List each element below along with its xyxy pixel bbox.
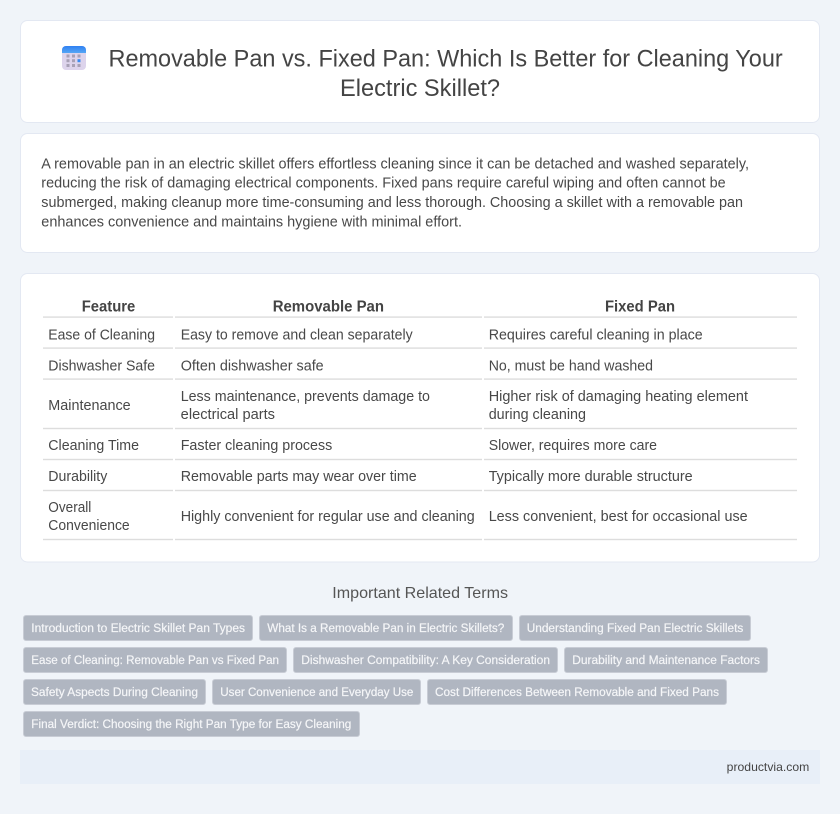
title: Removable Pan vs. Fixed Pan: Which Is Better for Cleaning Your [108,46,783,72]
row: overall convenience [48,500,748,534]
row: maintenance [48,389,748,423]
row: cleaning time: Slower, requires more care [489,438,657,454]
row: overall convenience: Less convenient, best for occasional use [489,509,748,525]
tag [24,616,252,640]
footer [20,750,820,784]
tag: What Is a Removable Pan in Electric Skillets? [267,621,505,635]
tag: Durability and Maintenance Factors [572,653,760,667]
tag [24,648,286,672]
title [108,46,783,102]
row: maintenance: Higher risk of damaging heating element [489,389,748,405]
table header row: Fixed Pan [605,299,675,316]
text block: summary: reducing the risk of damaging electrical components. Fixed pans require careful wiping and often cannot be [41,176,726,192]
table header row: Feature [82,299,135,316]
tag: Ease of Cleaning: Removable Pan vs Fixed Pan [31,653,279,667]
tag: Understanding Fixed Pan Electric Skillets [527,621,743,635]
row: maintenance: electrical parts [181,407,275,423]
tag [260,616,512,640]
tag: Final Verdict: Choosing the Right Pan Type for Easy Cleaning [31,717,351,731]
tag [428,680,726,704]
tag: Safety Aspects During Cleaning [31,685,198,699]
tag [564,648,768,672]
panel: title header [20,20,820,122]
panel: comparison table [20,274,820,562]
icon: calendar [62,46,86,70]
tag: Introduction to Electric Skillet Pan Types [31,621,245,635]
tag [294,648,558,672]
row: cleaning time: Cleaning Time [48,438,139,454]
row: durability [48,469,693,485]
tag: User Convenience and Everyday Use [220,685,414,699]
row: dishwasher safe: Often dishwasher safe [181,358,324,374]
tag [520,616,750,640]
tag: Cost Differences Between Removable and Fixed Pans [435,685,719,699]
row: dishwasher safe [48,358,653,374]
row: dishwasher safe: Dishwasher Safe [48,358,155,374]
table header row [82,299,675,316]
footer: productvia.com [727,760,809,774]
table header row: Removable Pan [273,299,384,316]
row: overall convenience: Convenience [48,518,130,534]
row: maintenance: during cleaning [489,407,586,423]
row: cleaning time: Faster cleaning process [181,438,332,454]
row: overall convenience: Overall [48,500,91,516]
tag [212,680,420,704]
row: cleaning time [48,438,657,454]
tag [24,680,206,704]
row: durability: Removable parts may wear over time [181,469,417,485]
row: overall convenience: Highly convenient for regular use and cleaning [181,509,475,525]
row: maintenance: Less maintenance, prevents damage to [181,389,430,405]
text block: summary [41,156,749,230]
panel: summary paragraph [20,134,820,252]
row: ease of cleaning: Requires careful cleaning in place [489,327,703,343]
row: dishwasher safe: No, must be hand washed [489,358,653,374]
title: Electric Skillet? [340,75,500,102]
text block: summary: submerged, making cleanup more time-consuming and less thorough. Choosing a skillet with a removable pan [41,195,743,211]
text block: summary: A removable pan in an electric skillet offers effortless cleaning since it can be detached and washed separately, [41,156,749,172]
row: maintenance: Maintenance [48,398,131,414]
tag [24,712,360,736]
row: ease of cleaning: Easy to remove and clean separately [181,327,413,343]
row: ease of cleaning [48,327,703,343]
row: durability: Durability [48,469,108,485]
text block: summary: enhances convenience and maintains hygiene with minimal effort. [41,214,462,230]
tag: Dishwasher Compatibility: A Key Consideration [301,653,550,667]
heading: related terms: Important Related Terms [332,585,508,602]
row: durability: Typically more durable structure [489,469,693,485]
row: ease of cleaning: Ease of Cleaning [48,327,155,343]
panel: related term tags [24,616,768,736]
